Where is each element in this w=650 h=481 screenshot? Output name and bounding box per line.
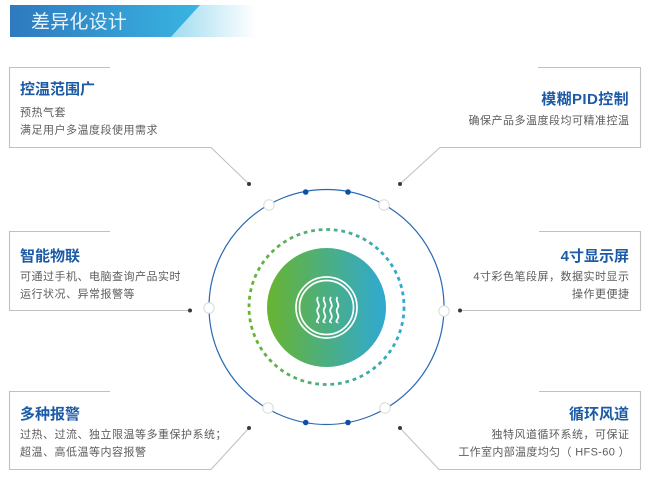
text block: 预热气套 xyxy=(20,107,66,119)
panel: smart IoT xyxy=(10,232,192,312)
text block: 4寸彩色笔段屏，数据实时显示 xyxy=(473,271,630,283)
gradient disc xyxy=(267,248,386,367)
icon: heat waves in double ring xyxy=(296,277,357,338)
heading: 多种报警 xyxy=(20,405,80,423)
heading: 智能物联 xyxy=(20,247,80,265)
panel: wide temperature range xyxy=(10,68,251,186)
ring nodes xyxy=(204,189,449,425)
heading: 循环风道 xyxy=(569,405,629,423)
text block: 过热、过流、独立限温等多重保护系统； xyxy=(20,429,227,441)
text block: 工作室内部温度均匀（ HFS-60 ） xyxy=(458,444,630,458)
heading: 模糊PID控制 xyxy=(541,90,629,108)
header title: 差异化设计 xyxy=(31,11,127,33)
text block: 满足用户多温度段使用需求 xyxy=(20,122,158,136)
panel: 4-inch display xyxy=(458,232,640,312)
text block: 可通过手机、电脑查询产品实时 xyxy=(20,271,181,283)
text block: 运行状况、异常报警等 xyxy=(20,286,135,300)
heading: 控温范围广 xyxy=(20,80,95,98)
text block: 操作更便捷 xyxy=(572,286,630,300)
text block: 确保产品多温度段均可精准控温 xyxy=(468,113,630,127)
header banner xyxy=(10,5,256,37)
panel: multiple alarms xyxy=(10,392,251,470)
panel: fuzzy PID control xyxy=(398,68,640,186)
center diagram xyxy=(204,189,449,425)
panel: circulating air duct xyxy=(398,392,640,470)
heading: 4寸显示屏 xyxy=(561,248,629,265)
outer ring xyxy=(209,190,444,424)
text block: 独特风道循环系统，可保证 xyxy=(492,429,630,441)
dashed ring xyxy=(249,230,404,384)
text block: 超温、高低温等内容报警 xyxy=(20,444,146,458)
